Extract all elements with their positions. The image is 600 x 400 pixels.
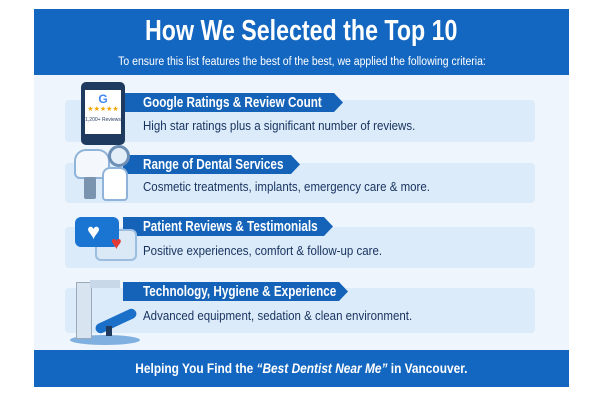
title: How We Selected the Top 10 xyxy=(145,15,458,47)
description: Positive experiences, comfort & follow-up care. xyxy=(143,244,382,258)
icon: phone: 1,200+ Reviews xyxy=(85,117,121,123)
icon: phone xyxy=(81,82,125,145)
ribbon: dental services: Range of Dental Services xyxy=(143,156,283,173)
subtitle: To ensure this list features the best of the best, we applied the following criteria: xyxy=(118,56,485,68)
row 2 xyxy=(65,145,535,203)
ribbon: technology: Technology, Hygiene & Experience xyxy=(143,283,336,300)
description: Advanced equipment, sedation & clean environment. xyxy=(143,309,412,323)
icon: speech bubbles with hearts: ♥ xyxy=(111,233,122,253)
icon: dental chair xyxy=(70,280,140,345)
description: High star ratings plus a significant number of reviews. xyxy=(143,119,415,133)
ribbon: google ratings: Google Ratings & Review Count xyxy=(143,94,322,111)
icon: phone: ★★★★★ xyxy=(87,106,119,113)
icon: speech bubbles with hearts xyxy=(75,217,137,261)
description: Cosmetic treatments, implants, emergency care & more. xyxy=(143,180,430,194)
header band xyxy=(34,9,569,75)
row 4 xyxy=(65,280,535,345)
footer text: Helping You Find the “Best Dentist Near Me” in Vancouver. xyxy=(135,360,468,376)
icon: phone: G xyxy=(98,92,108,106)
icon: teeth xyxy=(74,145,130,201)
ribbon: patient reviews: Patient Reviews & Testimonials xyxy=(143,218,318,235)
row 3 xyxy=(65,217,535,268)
icon: speech bubbles with hearts: ♥ xyxy=(87,219,100,244)
footer band xyxy=(34,350,569,387)
row 1 xyxy=(65,82,535,145)
